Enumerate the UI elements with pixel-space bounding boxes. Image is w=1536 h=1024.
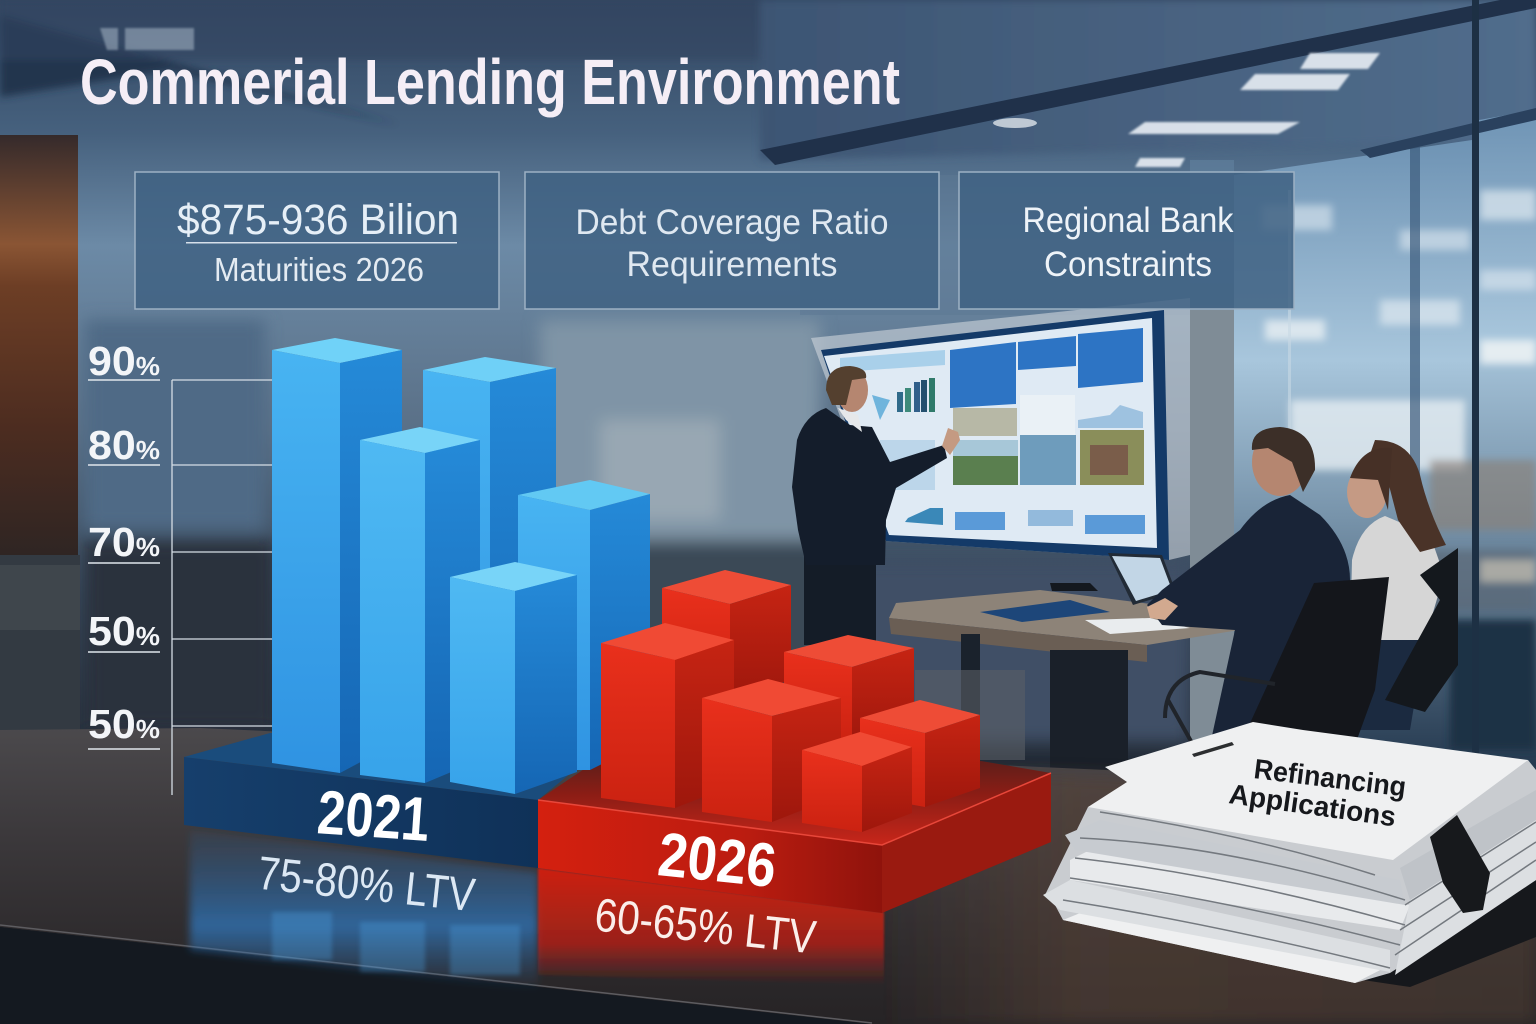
label: 2021: 2021 <box>315 778 432 855</box>
woman <box>1350 516 1444 640</box>
axis label 80%: 80% <box>88 422 160 468</box>
red bar far right <box>860 700 980 807</box>
blue bar back mid <box>518 480 650 770</box>
red bar back <box>662 570 791 700</box>
axis label 50% upper: 50% <box>88 608 160 654</box>
label: 2026: 2026 <box>655 820 779 901</box>
panel: debt coverage: Debt Coverage Ratio <box>576 203 888 242</box>
platform: 2026 <box>538 745 1051 913</box>
text: maturities label: Maturities 2026 <box>214 251 424 288</box>
heading: maturities amount: $875-936 Bilion <box>177 196 459 244</box>
paper stack: refinancing applications <box>1043 722 1536 987</box>
panel: regional bank: Regional Bank <box>1022 201 1234 240</box>
seated people <box>1147 427 1458 745</box>
panel: regional bank <box>959 172 1294 309</box>
axis <box>88 338 272 795</box>
title: Commerial Lending Environment <box>80 46 900 118</box>
glass frames <box>760 0 1536 165</box>
red bar middle <box>702 679 841 822</box>
panel: maturities <box>135 172 499 309</box>
label: 60-65% LTV: 60-65% LTV <box>592 888 819 964</box>
red bar front <box>802 732 912 832</box>
red bar right back <box>784 635 914 745</box>
axis label 90%: 90% <box>88 338 160 384</box>
bar chart: 2021 blue bars <box>272 338 650 794</box>
binder clip <box>1430 815 1490 913</box>
label: refinancing applications: Refinancing <box>1252 753 1408 803</box>
axis label 50% lower: 50% <box>88 701 160 747</box>
black folder under stack <box>1363 880 1536 987</box>
panel: regional bank: Constraints <box>1044 245 1212 284</box>
foreground desk <box>0 728 1536 1024</box>
paper stack: refinancing applications: Applications <box>1227 778 1398 832</box>
platform: 2021 <box>184 733 620 868</box>
wood panel <box>0 135 78 555</box>
man <box>1147 495 1350 745</box>
windows <box>1234 140 1472 770</box>
panel: debt coverage <box>525 172 939 309</box>
label: 75-80% LTV: 75-80% LTV <box>255 846 478 921</box>
chair <box>1240 577 1389 745</box>
presentation screen <box>811 298 1190 560</box>
bar chart: 2026 red bars <box>601 570 980 832</box>
blue bar back right <box>423 357 556 770</box>
panel: debt coverage: Requirements <box>626 245 838 284</box>
blue bar front right <box>450 562 577 794</box>
meeting table <box>889 553 1239 780</box>
axis label 70%: 70% <box>88 519 160 565</box>
red bar left <box>601 623 734 808</box>
presenter <box>792 366 960 645</box>
blue bar front left <box>360 427 480 783</box>
top sheet <box>1088 722 1528 860</box>
reflections on desk <box>190 830 884 990</box>
blue bar tall <box>272 338 402 773</box>
